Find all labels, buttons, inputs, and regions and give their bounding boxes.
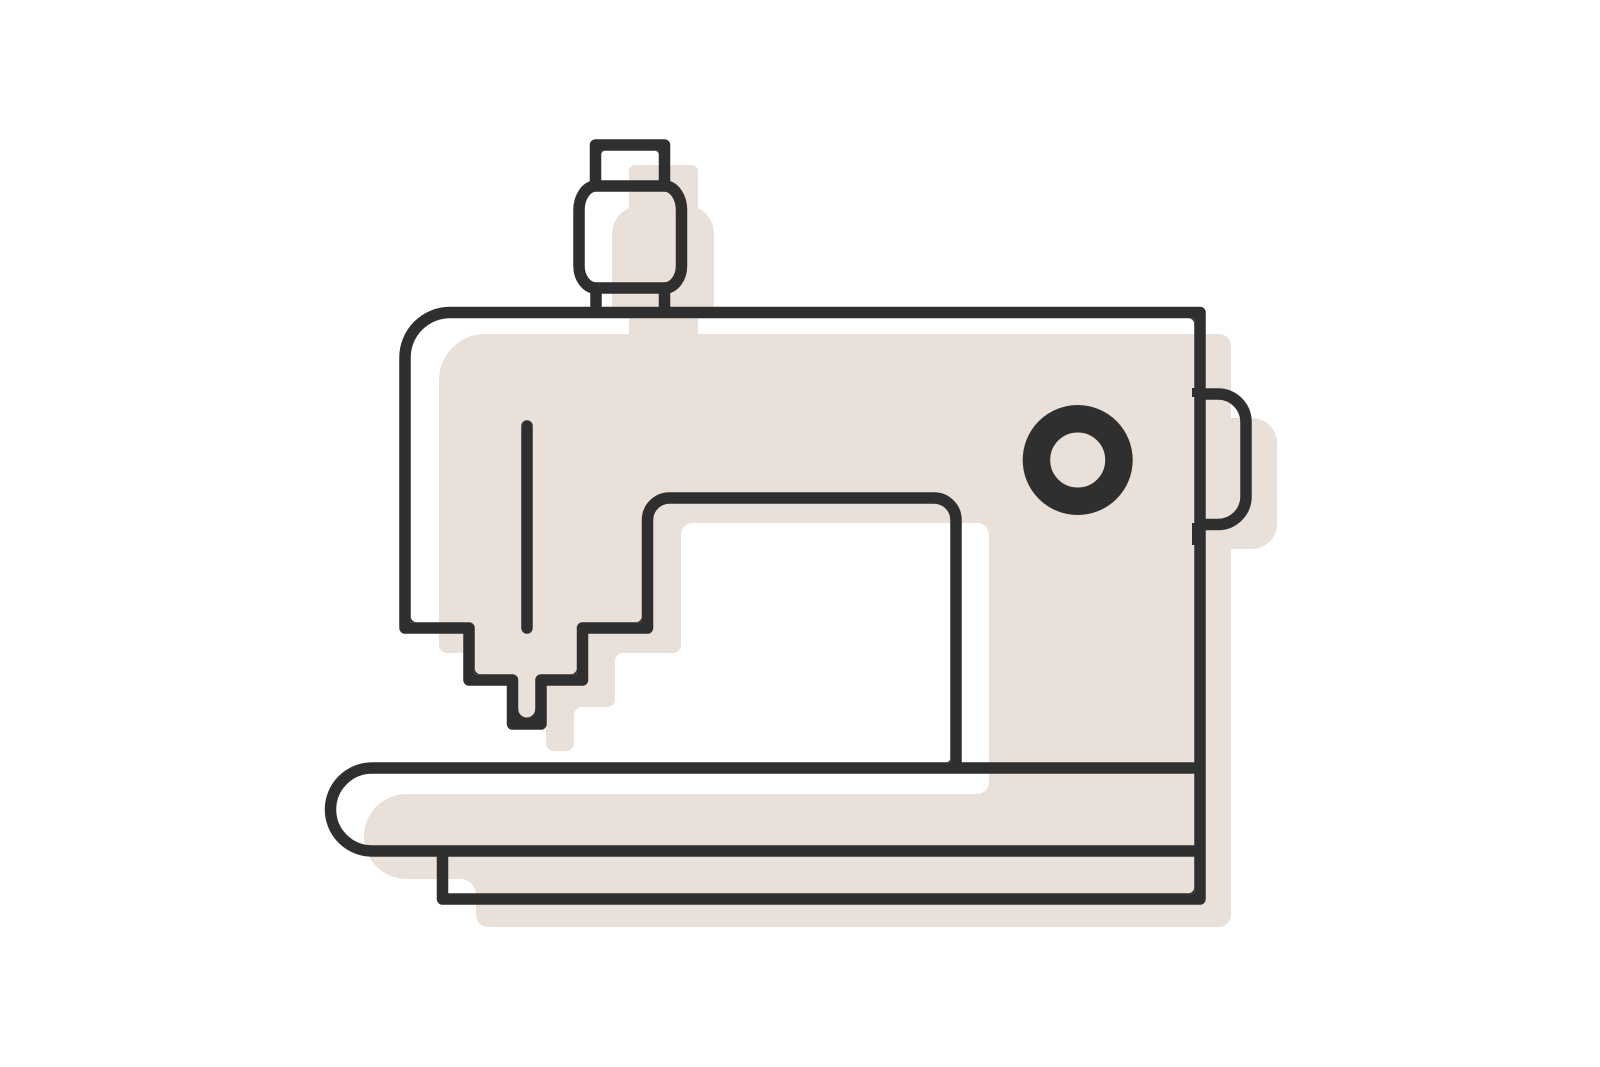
outline: hand wheel <box>1200 394 1246 524</box>
outline: base, right column, arm and needle head <box>405 312 1200 899</box>
needle bar <box>521 426 533 628</box>
shadow: machine body <box>364 334 1277 927</box>
knob <box>1036 419 1119 501</box>
machine outline <box>330 145 1246 899</box>
outline: thread spool <box>579 145 682 312</box>
shadow: thread spool <box>612 165 714 340</box>
offset beige shadow shape <box>364 165 1277 927</box>
corner fillets, nozzle tip and wheel ticks <box>411 151 1196 893</box>
outline: sewing bed <box>330 768 1203 851</box>
